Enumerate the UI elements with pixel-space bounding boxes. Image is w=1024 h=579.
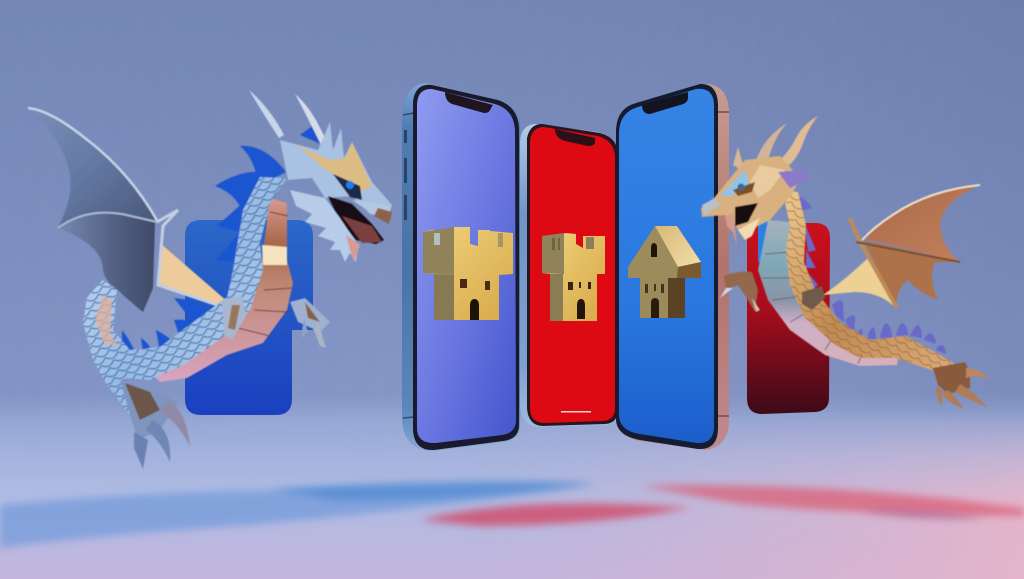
right phone [616, 84, 729, 450]
castle icon [542, 233, 605, 321]
back spines [122, 122, 330, 360]
left silver dragon [28, 90, 392, 469]
phone body [402, 83, 520, 451]
phone body [616, 84, 729, 450]
head [249, 90, 392, 262]
screen [417, 89, 516, 443]
gold scaled body [782, 190, 965, 380]
wing [823, 185, 980, 308]
head [701, 116, 818, 246]
front claw [290, 298, 330, 348]
hind foot [120, 380, 190, 469]
blue card behind left dragon [185, 220, 313, 415]
hip claw [222, 296, 246, 340]
screen [530, 127, 615, 423]
silver scaled body [83, 177, 287, 420]
castle icon [423, 227, 513, 320]
left phone [402, 83, 520, 451]
home bar [561, 411, 591, 412]
notch [445, 92, 493, 113]
front claws [720, 272, 825, 312]
right golden dragon [701, 116, 990, 409]
notch [555, 129, 595, 146]
middle phone [520, 124, 618, 427]
purple spines [782, 175, 946, 354]
phones group [402, 83, 729, 451]
belly [150, 198, 293, 382]
notch [642, 92, 688, 114]
blue panel strip behind right dragon neck [758, 220, 775, 262]
red card behind right dragon [747, 223, 830, 414]
belly [758, 220, 900, 366]
hind foot [933, 362, 990, 409]
house icon [628, 226, 701, 318]
screen [619, 89, 714, 443]
wing [28, 108, 232, 312]
